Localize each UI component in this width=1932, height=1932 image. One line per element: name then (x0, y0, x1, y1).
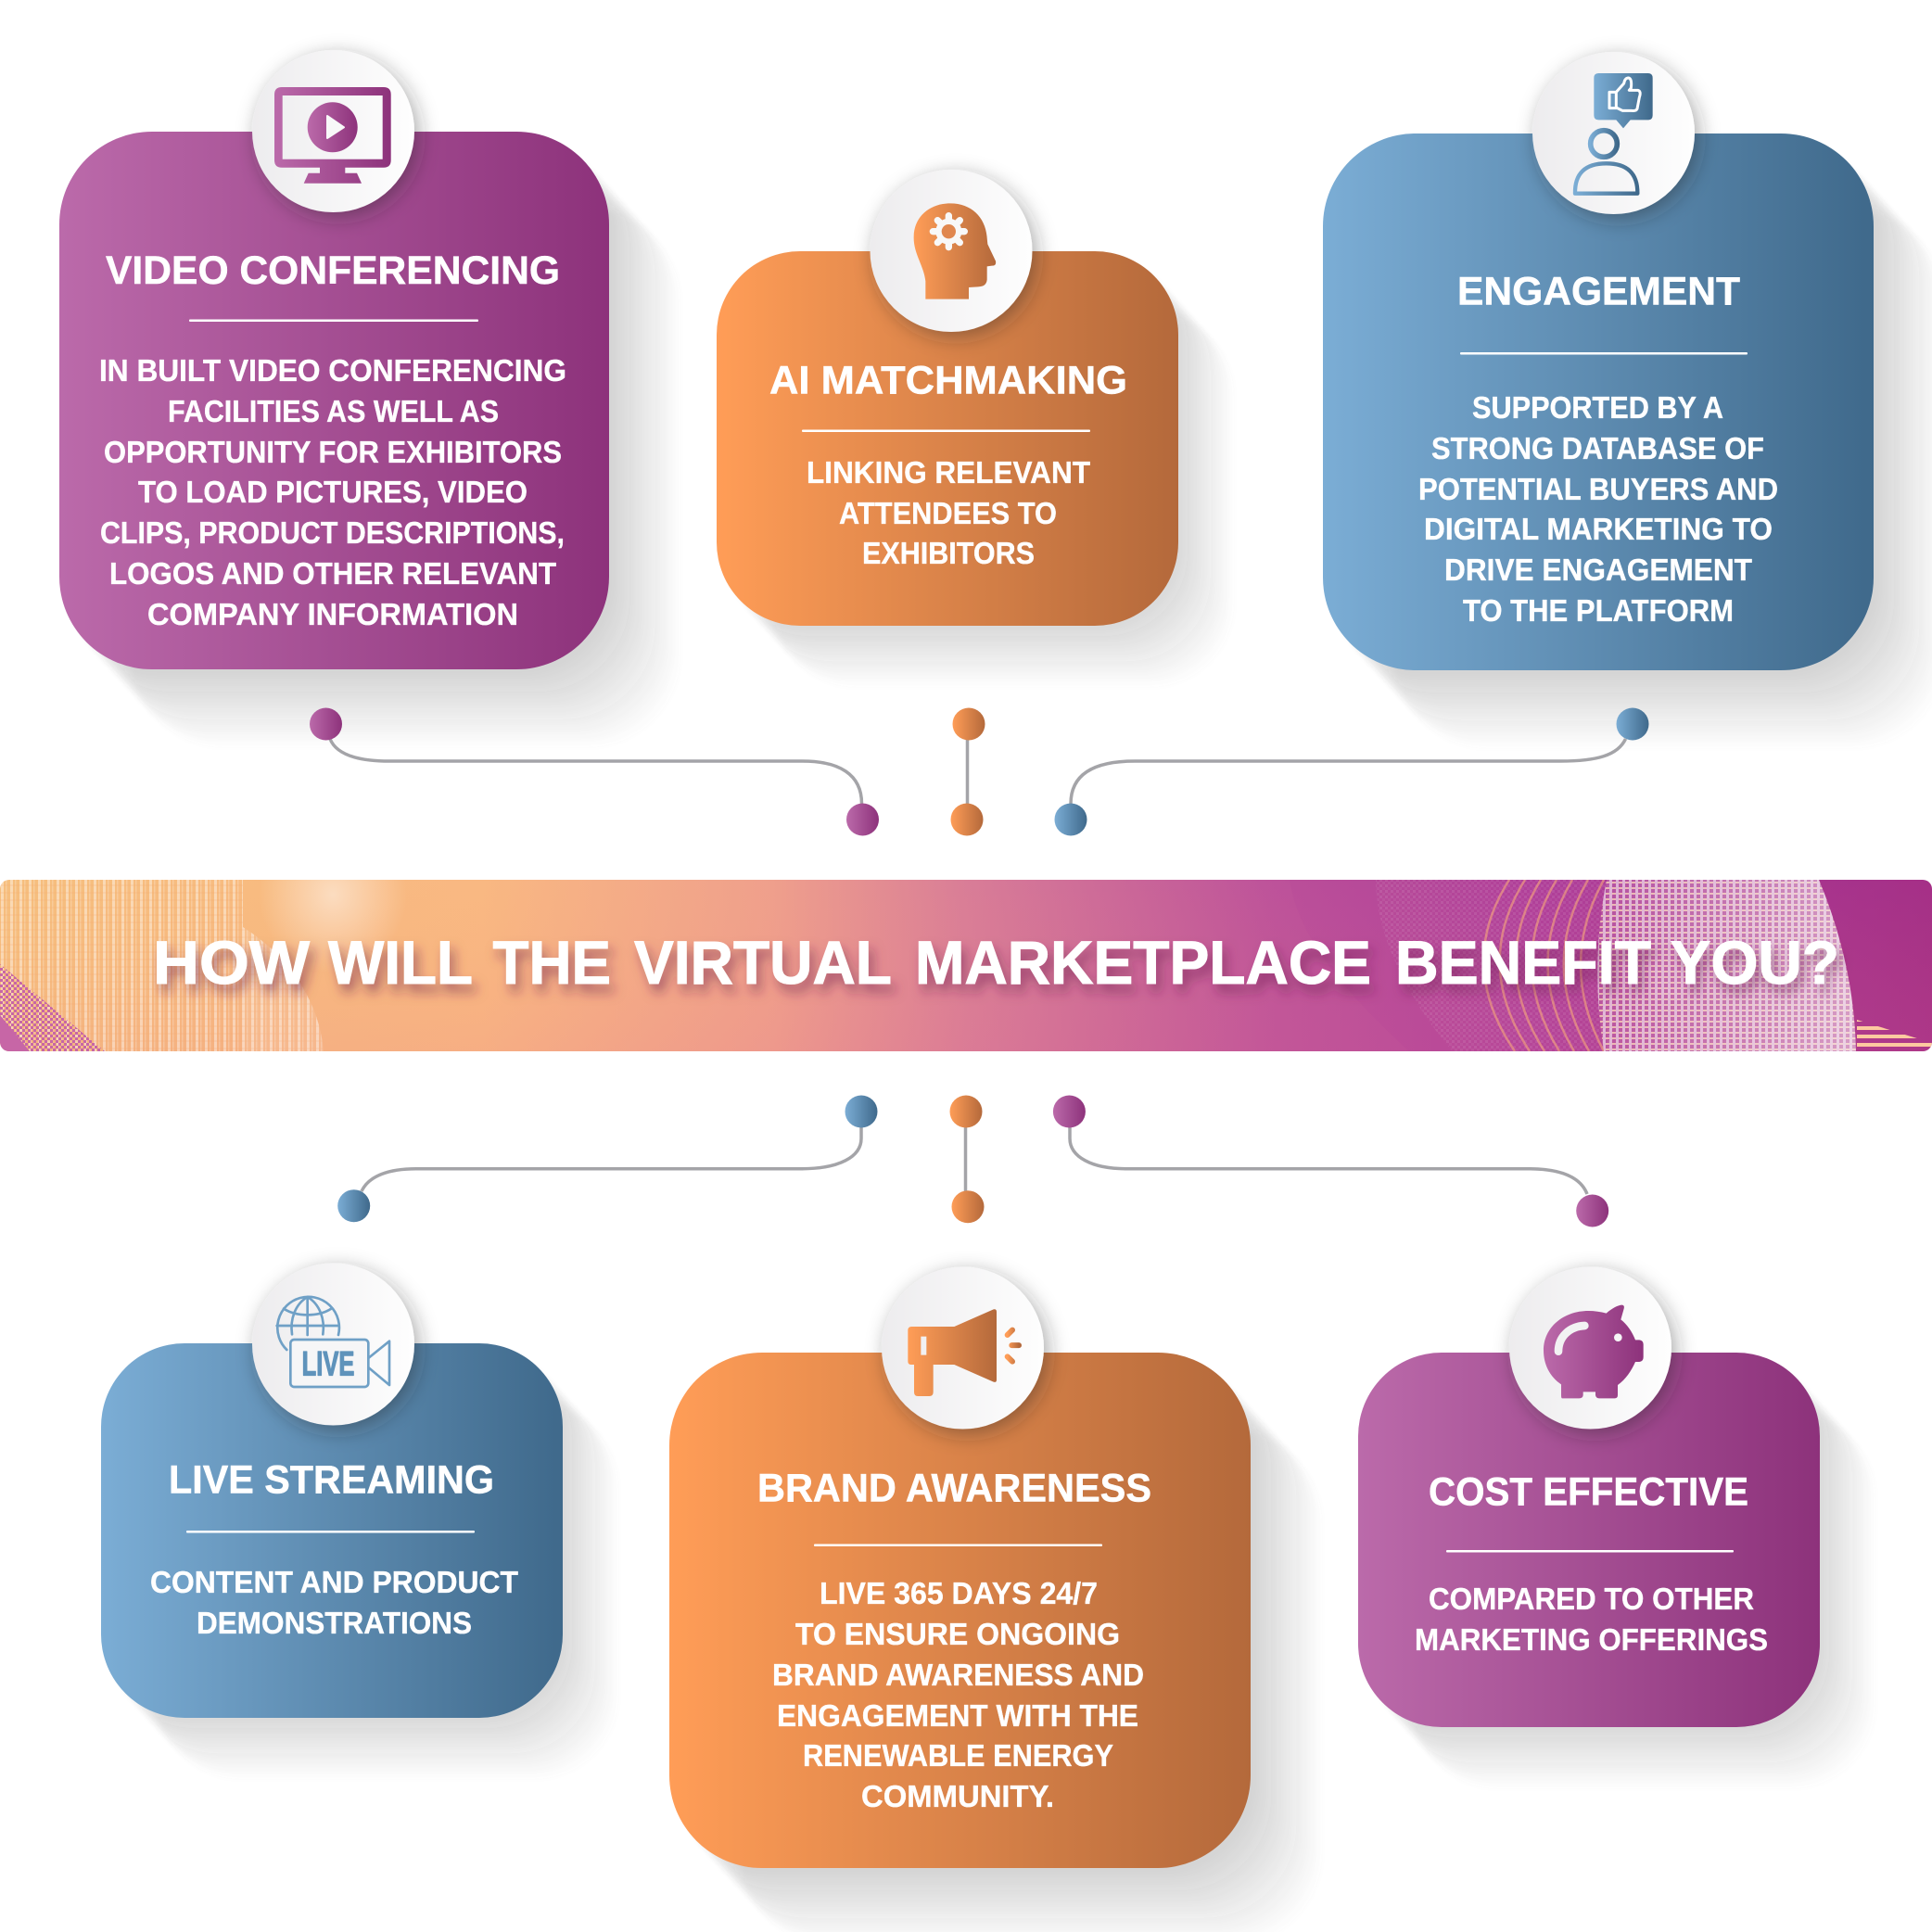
icon circle: person with thumbs-up bubble (1532, 52, 1695, 214)
body text: live streaming: DEMONSTRATIONS (197, 1607, 472, 1641)
body text: video conferencing: TO LOAD PICTURES, VIDEO (138, 476, 527, 510)
icon circle: piggy bank (1509, 1266, 1671, 1430)
body text: engagement (1418, 391, 1778, 629)
body text: AI matchmaking (807, 456, 1090, 571)
long shadow: cost effective card (1363, 1357, 1875, 1788)
icon circle: globe and live camera: LIVE (302, 1343, 354, 1382)
banner title text: YOU? (1671, 928, 1839, 997)
panel: live streaming (101, 1263, 618, 1779)
body text: brand awareness: BRAND AWARENESS AND (772, 1659, 1144, 1693)
long shadow: live streaming card (106, 1348, 618, 1779)
body text: video conferencing: IN BUILT VIDEO CONFERENCING (99, 354, 566, 388)
icon circle: megaphone (882, 1266, 1044, 1430)
panel: brand awareness (669, 1266, 1322, 1932)
body text: engagement: DRIVE ENGAGEMENT (1444, 553, 1752, 588)
connectors: bottom centre (949, 1096, 985, 1223)
heading: cost effective: COST EFFECTIVE (1429, 1470, 1748, 1515)
card background (1323, 133, 1874, 670)
connectors: top left (310, 708, 879, 836)
title banner (0, 880, 1932, 1051)
connectors: top right (1055, 708, 1648, 836)
card background (717, 251, 1178, 626)
banner title text: THE (493, 928, 611, 997)
body text: engagement: STRONG DATABASE OF (1431, 432, 1764, 466)
body text: brand awareness: COMMUNITY. (861, 1780, 1054, 1814)
long shadow: AI matchmaking card (721, 256, 1234, 687)
body text: video conferencing: FACILITIES AS WELL AS (168, 395, 499, 429)
body text: video conferencing (99, 354, 566, 632)
long shadow: video conferencing card (65, 137, 680, 747)
banner title text: HOW (153, 928, 311, 997)
body text: engagement: DIGITAL MARKETING TO (1424, 513, 1773, 547)
icon circle: monitor with play button (252, 50, 414, 212)
body text: live streaming: CONTENT AND PRODUCT (150, 1566, 519, 1600)
body text: brand awareness (772, 1577, 1144, 1814)
body text: brand awareness: RENEWABLE ENERGY (803, 1739, 1113, 1773)
connectors: bottom right (1053, 1096, 1608, 1227)
body text: cost effective: COMPARED TO OTHER (1429, 1582, 1754, 1617)
card background (1358, 1353, 1820, 1727)
card background (101, 1343, 563, 1718)
body text: brand awareness: ENGAGEMENT WITH THE (777, 1699, 1138, 1734)
body text: AI matchmaking: ATTENDEES TO (839, 497, 1057, 531)
body text: brand awareness: TO ENSURE ONGOING (795, 1618, 1120, 1652)
body text: video conferencing: LOGOS AND OTHER RELEVANT (109, 557, 556, 591)
body text: cost effective (1415, 1582, 1768, 1658)
icon circle: globe and live camera (252, 1263, 414, 1426)
body text: brand awareness: LIVE 365 DAYS 24/7 (820, 1577, 1098, 1611)
panel: AI matchmaking (717, 170, 1234, 687)
connectors: top centre (951, 708, 985, 836)
long shadow: brand awareness card (675, 1358, 1322, 1932)
panel: video conferencing (59, 50, 680, 747)
heading: engagement: ENGAGEMENT (1457, 271, 1740, 313)
body text: cost effective: MARKETING OFFERINGS (1415, 1623, 1768, 1658)
icon circle: head with gear (870, 170, 1033, 332)
card background (59, 132, 609, 669)
banner title text (153, 928, 1839, 997)
body text: live streaming (150, 1566, 519, 1641)
body text: video conferencing: CLIPS, PRODUCT DESCRIPTIONS, (100, 516, 565, 551)
panel: cost effective (1358, 1266, 1875, 1788)
banner title text: VIRTUAL (634, 928, 892, 997)
banner title text: MARKETPLACE (915, 928, 1371, 997)
body text: engagement: POTENTIAL BUYERS AND (1418, 473, 1778, 507)
heading: live streaming: LIVE STREAMING (169, 1459, 494, 1502)
body text: engagement: SUPPORTED BY A (1472, 391, 1723, 426)
body text: engagement: TO THE PLATFORM (1463, 594, 1734, 629)
banner title text: WILL (328, 928, 473, 997)
heading: brand awareness: BRAND AWARENESS (757, 1467, 1151, 1511)
body text: video conferencing: OPPORTUNITY FOR EXHIBITORS (104, 436, 562, 470)
heading: AI matchmaking: AI MATCHMAKING (769, 360, 1127, 402)
banner title text: BENEFIT (1395, 928, 1651, 997)
body text: AI matchmaking: LINKING RELEVANT (807, 456, 1090, 490)
body text: AI matchmaking: EXHIBITORS (862, 537, 1035, 571)
card background (669, 1353, 1251, 1868)
connectors: bottom left (337, 1096, 877, 1222)
long shadow: engagement card (1328, 139, 1932, 748)
body text: video conferencing: COMPANY INFORMATION (147, 598, 518, 632)
panel: engagement (1323, 52, 1932, 748)
heading: video conferencing: VIDEO CONFERENCING (106, 249, 560, 293)
